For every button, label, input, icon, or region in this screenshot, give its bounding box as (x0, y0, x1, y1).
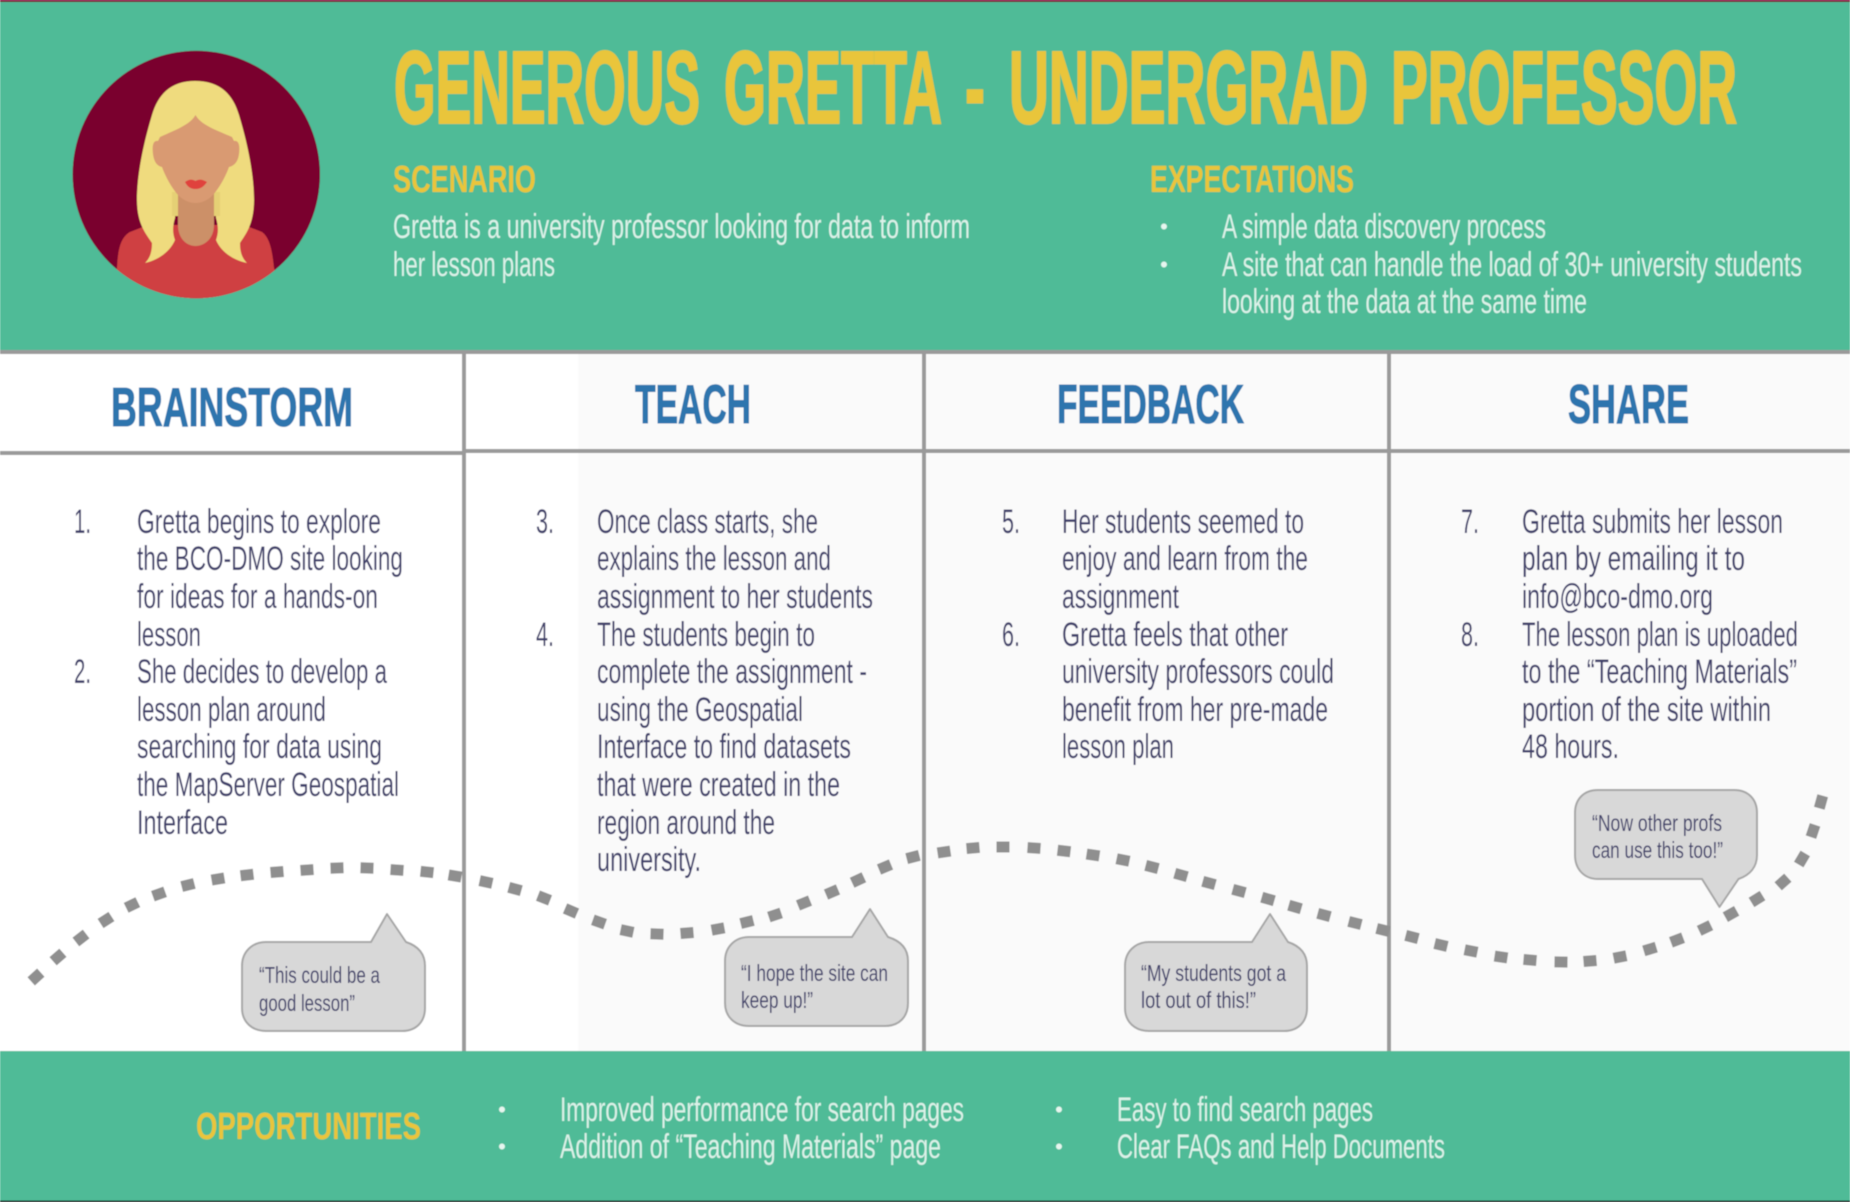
heading: share: SHARE (1568, 373, 1689, 435)
expectations block: • (1160, 214, 1168, 239)
expectations block: A simple data discovery process (1222, 208, 1546, 246)
journey line: dashed curve (36, 802, 1821, 977)
callout: teach quote: keep up!” (741, 987, 813, 1013)
scenario block: Gretta is a university professor looking for data to inform (393, 208, 970, 246)
panel: opportunities (0, 1051, 1850, 1202)
steps 5 and 6: enjoy and learn from the (1062, 540, 1308, 578)
callout: brainstorm quote: good lesson” (259, 990, 355, 1016)
title (394, 30, 1737, 145)
steps 5 and 6: university professors could (1062, 653, 1334, 691)
scenario block (393, 159, 970, 284)
steps 1 and 2: for ideas for a hands-on (137, 578, 378, 616)
icon: Gretta avatar (73, 51, 320, 310)
steps 3 and 4: explains the lesson and (597, 540, 831, 578)
title: GENEROUS (394, 30, 700, 145)
opportunities list left (498, 1091, 964, 1166)
heading: brainstorm: BRAINSTORM (111, 376, 353, 438)
steps 3 and 4: that were created in the (597, 766, 840, 804)
expectations block: EXPECTATIONS (1150, 159, 1354, 201)
expectations block: looking at the data at the same time (1222, 283, 1587, 321)
opportunities list left: Addition of “Teaching Materials” page (560, 1128, 941, 1166)
expectations block: • (1160, 252, 1168, 277)
steps 5 and 6: Gretta feels that other (1062, 616, 1288, 654)
callout: teach quote (725, 909, 908, 1026)
panel: teach (536, 373, 873, 879)
opportunities list right: • (1055, 1134, 1063, 1159)
panel: header (0, 0, 1850, 350)
expectations block (1150, 159, 1802, 321)
steps 7 and 8: 7. (1461, 503, 1479, 541)
opportunities list right: Easy to find search pages (1117, 1091, 1373, 1129)
steps 1 and 2: the BCO-DMO site looking (137, 540, 403, 578)
steps 7 and 8 (1461, 503, 1798, 766)
steps 3 and 4: Once class starts, she (597, 503, 818, 541)
panel: brainstorm (74, 376, 403, 842)
steps 3 and 4: 4. (536, 616, 554, 654)
steps 3 and 4: using the Geospatial (597, 691, 803, 729)
steps 1 and 2: She decides to develop a (137, 653, 387, 691)
callout: feedback quote: lot out of this!” (1141, 987, 1256, 1013)
steps 5 and 6: lesson plan (1062, 728, 1174, 766)
steps 1 and 2 (74, 503, 403, 842)
steps 1 and 2: Interface (137, 804, 228, 842)
steps 5 and 6 (1002, 503, 1334, 766)
callout: brainstorm quote: “This could be a (259, 962, 380, 988)
title: - (965, 30, 985, 145)
steps 1 and 2: lesson plan around (137, 691, 326, 729)
steps 3 and 4: 3. (536, 503, 554, 541)
steps 7 and 8: info@bco-dmo.org (1522, 578, 1713, 616)
steps 5 and 6: 5. (1002, 503, 1020, 541)
steps 1 and 2: 1. (74, 503, 91, 541)
opportunities list left: Improved performance for search pages (560, 1091, 964, 1129)
steps 3 and 4: Interface to find datasets (597, 728, 851, 766)
heading: feedback: FEEDBACK (1057, 373, 1244, 435)
panel: feedback (1002, 373, 1334, 766)
callout: feedback quote (1125, 914, 1307, 1031)
steps 1 and 2: 2. (74, 653, 91, 691)
steps 7 and 8: plan by emailing it to (1522, 540, 1745, 578)
opportunities list right (1055, 1091, 1445, 1166)
scenario block: her lesson plans (393, 246, 555, 284)
steps 5 and 6: Her students seemed to (1062, 503, 1304, 541)
steps 3 and 4: complete the assignment - (597, 653, 867, 691)
title: GRETTA (724, 30, 942, 145)
steps 3 and 4 (536, 503, 873, 879)
panel: share (1461, 373, 1798, 766)
steps 7 and 8: 48 hours. (1522, 728, 1619, 766)
callout: teach quote: “I hope the site can (741, 960, 888, 986)
steps 3 and 4: assignment to her students (597, 578, 873, 616)
callout: brainstorm quote (242, 914, 425, 1031)
steps 5 and 6: assignment (1062, 578, 1179, 616)
opportunities list right: Clear FAQs and Help Documents (1117, 1128, 1445, 1166)
steps 3 and 4: The students begin to (597, 616, 815, 654)
callout: feedback quote: “My students got a (1141, 960, 1286, 986)
steps 5 and 6: 6. (1002, 616, 1020, 654)
opportunities list left: • (498, 1134, 506, 1159)
steps 3 and 4: region around the (597, 804, 775, 842)
callout: share quote (1575, 790, 1757, 907)
title: UNDERGRAD (1009, 30, 1368, 145)
steps 3 and 4: university. (597, 841, 701, 879)
steps 1 and 2: lesson (137, 616, 201, 654)
callout: share quote: “Now other profs (1592, 810, 1722, 836)
heading: teach: TEACH (635, 373, 751, 435)
steps 5 and 6: benefit from her pre-made (1062, 691, 1328, 729)
steps 1 and 2: searching for data using (137, 728, 382, 766)
heading: opportunities: OPPORTUNITIES (196, 1106, 421, 1148)
steps 7 and 8: 8. (1461, 616, 1479, 654)
steps 1 and 2: the MapServer Geospatial (137, 766, 399, 804)
scenario block: SCENARIO (393, 159, 536, 201)
opportunities list right: • (1055, 1097, 1063, 1122)
steps 1 and 2: Gretta begins to explore (137, 503, 381, 541)
callout: share quote: can use this too!” (1592, 837, 1723, 863)
opportunities list left: • (498, 1097, 506, 1122)
